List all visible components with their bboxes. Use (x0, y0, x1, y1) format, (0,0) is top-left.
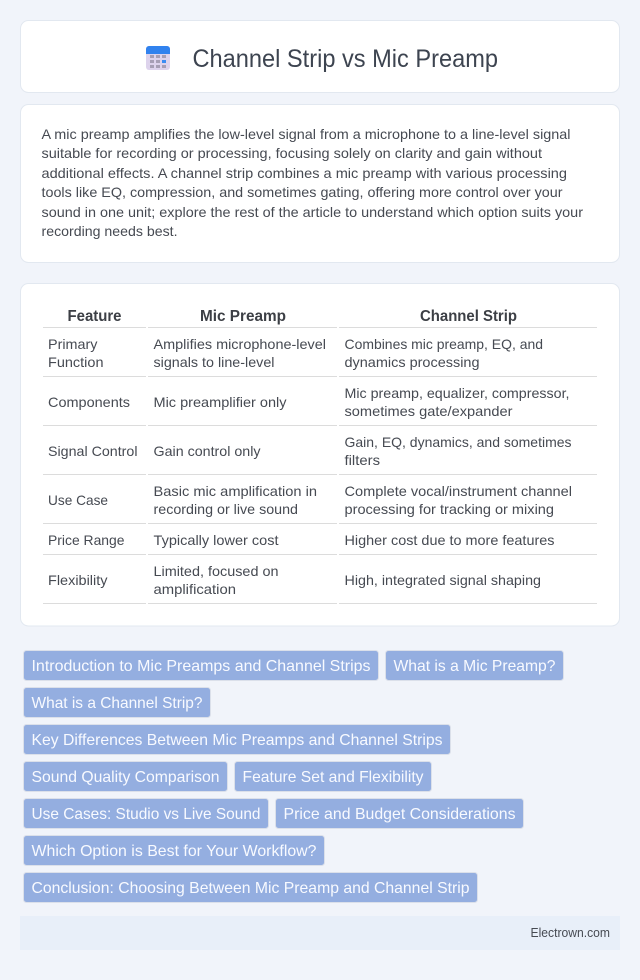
chip: key differences: Key Differences Between Mic Preamps and Channel Strips (32, 732, 442, 749)
row: signal control (48, 434, 572, 468)
row: flexibility: Flexibility (48, 572, 108, 588)
table header row (68, 308, 517, 325)
chip: price and budget: Price and Budget Considerations (284, 806, 516, 823)
panel: topic chips (24, 650, 564, 902)
row: signal control: filters (344, 452, 380, 468)
chip: price and budget (276, 798, 524, 828)
row: flexibility: amplification (154, 581, 236, 597)
chip: key differences (24, 724, 450, 754)
row: primary function: Function (48, 354, 104, 370)
chip: feature set (234, 762, 432, 792)
panel: comparison table (20, 284, 620, 626)
chip: which option: Which Option is Best for Your Workflow? (32, 843, 317, 860)
row: use case: Complete vocal/instrument channel (344, 483, 572, 499)
panel: intro text: additional effects. A channel strip combines a mic preamp with various processing (42, 165, 567, 181)
table header row: Channel Strip (420, 308, 517, 325)
row: components: sometimes gate/expander (344, 403, 513, 419)
row: components: Mic preamplifier only (154, 394, 286, 410)
panel: intro text (20, 104, 620, 262)
row: use case: recording or live sound (154, 501, 298, 517)
chip: sound quality (24, 762, 228, 792)
row: price range: Higher cost due to more features (344, 532, 554, 548)
panel: intro text: tools like EQ, compression, and sometimes gating, offering more control over your (42, 184, 563, 200)
row: signal control: Gain, EQ, dynamics, and sometimes (344, 434, 572, 450)
panel: intro text: recording needs best. (42, 223, 178, 239)
header panel (20, 20, 620, 92)
panel: intro text: suitable for recording or processing, focusing solely on clarity and gain without (42, 145, 542, 161)
row: signal control: Signal Control (48, 443, 138, 459)
chip: use cases (24, 798, 268, 828)
chip: what is a mic preamp: What is a Mic Preamp? (394, 658, 556, 675)
row: signal control: Gain control only (154, 443, 260, 459)
title: Channel Strip vs Mic Preamp (192, 45, 498, 73)
row: flexibility: High, integrated signal shaping (344, 572, 541, 588)
row: components (48, 385, 570, 419)
row: use case: processing for tracking or mixing (344, 501, 554, 517)
chip: what is a mic preamp (386, 650, 564, 680)
chip: what is a channel strip (24, 688, 210, 718)
row: primary function: dynamics processing (344, 354, 480, 370)
panel: intro text: A mic preamp amplifies the low-level signal from a microphone to a line-level signal (42, 126, 570, 142)
footer (20, 916, 620, 950)
chip: introduction: Introduction to Mic Preamps and Channel Strips (32, 658, 370, 675)
chip: introduction (24, 650, 378, 680)
chip: sound quality: Sound Quality Comparison (32, 769, 220, 786)
row: flexibility (48, 563, 541, 597)
row: primary function: signals to line-level (154, 354, 274, 370)
row: primary function: Combines mic preamp, EQ, and (344, 336, 543, 352)
row: price range: Typically lower cost (154, 532, 279, 548)
chip: what is a channel strip: What is a Channel Strip? (32, 695, 203, 712)
row: use case (48, 483, 572, 517)
row: use case: Use Case (48, 492, 108, 508)
chip: feature set: Feature Set and Flexibility (242, 769, 424, 786)
row: primary function: Primary (48, 336, 98, 352)
row: components: Components (48, 394, 130, 410)
icon: calendar (146, 46, 170, 70)
chip: conclusion (24, 872, 478, 902)
chip: conclusion: Conclusion: Choosing Between Mic Preamp and Channel Strip (32, 880, 470, 897)
row: price range (48, 532, 554, 548)
row: primary function: Amplifies microphone-level (154, 336, 326, 352)
row: flexibility: Limited, focused on (154, 563, 278, 579)
row: primary function (48, 336, 543, 370)
table header row: Mic Preamp (200, 308, 286, 325)
panel: intro text: sound in one unit; explore the rest of the article to understand which option suits your (42, 204, 583, 220)
chip: use cases: Use Cases: Studio vs Live Sound (32, 806, 260, 823)
table header row: Feature (68, 308, 122, 325)
footer: Electrown.com (530, 926, 610, 940)
row: use case: Basic mic amplification in (154, 483, 317, 499)
row: components: Mic preamp, equalizer, compressor, (344, 385, 570, 401)
chip: which option (24, 836, 324, 866)
row: price range: Price Range (48, 532, 125, 548)
